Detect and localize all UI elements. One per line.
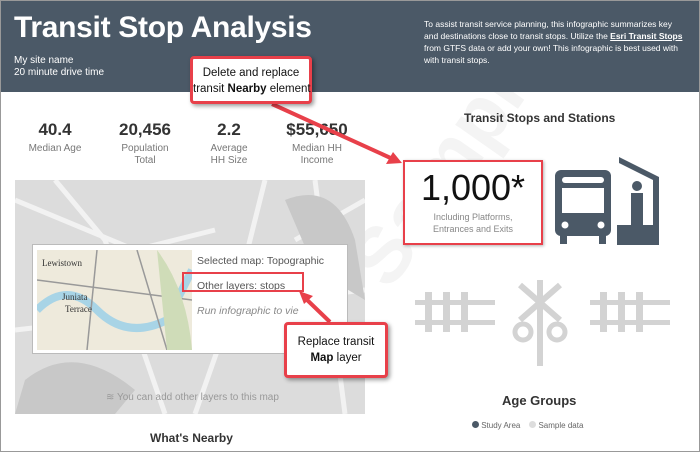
stat: median age: 40.4 bbox=[38, 120, 72, 139]
stat: population: Total bbox=[134, 155, 156, 166]
map panel bbox=[15, 180, 365, 414]
map thumbnail: Lewistown bbox=[42, 258, 82, 268]
transit count box: 1,000* bbox=[421, 167, 525, 208]
description: and destinations close to transit stops. Utilize the Esri Transit Stops bbox=[424, 31, 682, 41]
stat: population bbox=[119, 120, 171, 166]
stat: income: $55,650 bbox=[286, 120, 348, 139]
red box around other layers bbox=[182, 272, 304, 292]
map info text: Run infographic to vie bbox=[197, 305, 299, 317]
map info text: Other layers: stops bbox=[197, 280, 285, 292]
stat: median age bbox=[29, 120, 81, 154]
transit count box bbox=[403, 160, 543, 245]
icon: railway crossing bbox=[415, 280, 670, 366]
age groups heading: Age Groups bbox=[502, 393, 576, 408]
callout: nearby bbox=[190, 56, 312, 104]
stat: income: Median HH bbox=[292, 143, 342, 154]
site info: My site name bbox=[14, 55, 73, 66]
whats nearby heading: What's Nearby bbox=[150, 431, 233, 445]
description: with transit stops. bbox=[424, 55, 490, 65]
icon: bus bbox=[555, 170, 611, 244]
callout: map layer: Map layer bbox=[310, 352, 362, 364]
stat: income: Income bbox=[301, 155, 333, 166]
legend: Study Area Sample data bbox=[481, 421, 583, 430]
site info: 20 minute drive time bbox=[14, 67, 104, 78]
description: To assist transit service planning, this infographic summarizes key bbox=[424, 19, 672, 29]
callout: map layer: Replace transit bbox=[298, 336, 374, 348]
description bbox=[424, 19, 682, 65]
map info text: Selected map: Topographic bbox=[197, 255, 324, 267]
map info card bbox=[32, 244, 348, 354]
transit count box: Entrances and Exits bbox=[433, 224, 513, 234]
stat: hh size: 2.2 bbox=[217, 120, 241, 139]
stats row bbox=[29, 120, 348, 166]
map thumbnail: Terrace bbox=[65, 304, 92, 314]
map thumbnail: Juniata bbox=[62, 292, 88, 302]
callout: nearby: transit Nearby element bbox=[193, 83, 311, 95]
transit count box: Including Platforms, bbox=[433, 212, 513, 222]
stat: population: 20,456 bbox=[119, 120, 171, 139]
callout: nearby: Delete and replace bbox=[203, 67, 299, 79]
icon: shelter bbox=[617, 157, 659, 245]
stat: income bbox=[286, 120, 348, 166]
description: from GTFS data or add your own! This infographic is best used with bbox=[424, 43, 678, 53]
map thumbnail bbox=[37, 250, 192, 350]
map info text bbox=[197, 255, 324, 317]
layers note: ≋ You can add other layers to this map bbox=[106, 392, 279, 403]
stat: median age: Median Age bbox=[29, 143, 81, 154]
header bbox=[1, 1, 699, 92]
site info bbox=[14, 55, 104, 78]
stat: population: Population bbox=[121, 143, 169, 154]
stat: hh size: Average bbox=[210, 143, 248, 154]
stat: hh size bbox=[210, 120, 248, 166]
title: Transit Stop Analysis bbox=[14, 11, 312, 44]
transit heading: Transit Stops and Stations bbox=[464, 111, 615, 125]
stat: hh size: HH Size bbox=[211, 155, 247, 166]
callout: map layer bbox=[284, 322, 388, 378]
